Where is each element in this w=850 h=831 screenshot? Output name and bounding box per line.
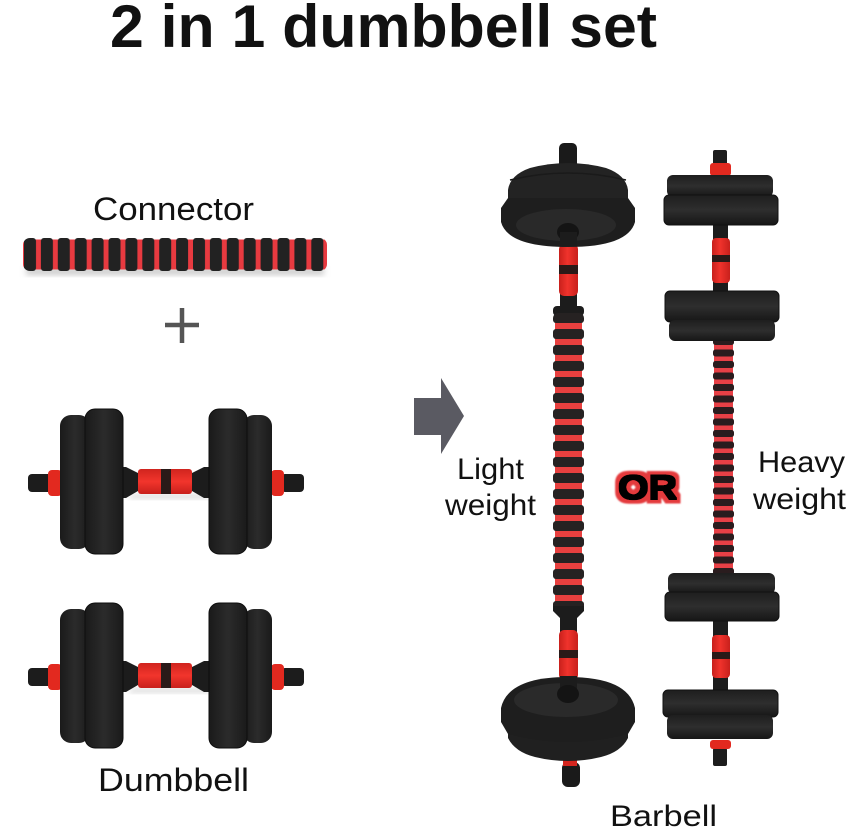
label: light weight: weight [444,489,537,522]
label: dumbbell: Dumbbell [98,762,249,798]
arrow [414,378,464,454]
dumbbell top [28,409,304,554]
plus sign [165,308,199,343]
label: connector: Connector [93,191,254,227]
barbell light [501,143,635,787]
connector bar [23,238,327,275]
label: heavy weight: Heavy [758,446,845,479]
label: light weight: Light [457,453,525,486]
dumbbell bottom [28,603,304,748]
barbell heavy [663,150,779,766]
label: or: OR [618,469,677,507]
label: heavy weight: weight [752,483,847,516]
